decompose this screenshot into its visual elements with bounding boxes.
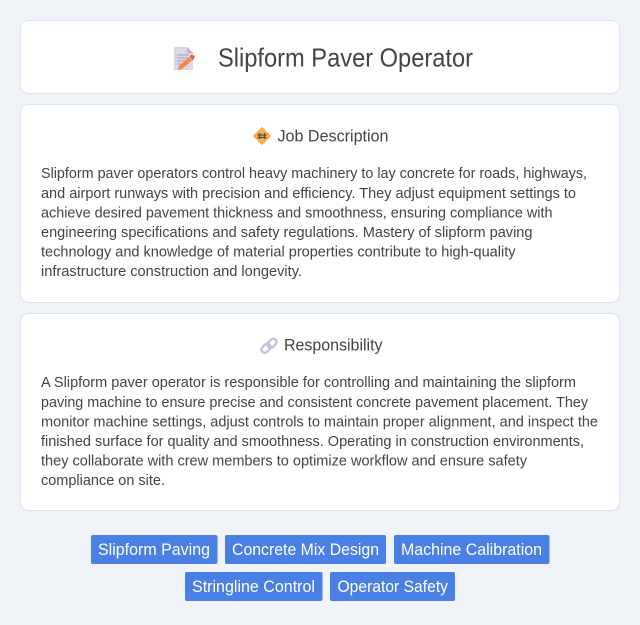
text block: job description: engineering specifications and safety regulations. Mastery of slipform paving bbox=[41, 225, 532, 241]
tag: Slipform Paving: Slipform Paving bbox=[98, 541, 210, 559]
tag: Machine Calibration bbox=[394, 535, 550, 564]
tag: Concrete Mix Design: Concrete Mix Design bbox=[232, 541, 379, 559]
tag: Stringline Control: Stringline Control bbox=[192, 578, 315, 596]
tag: Operator Safety bbox=[330, 572, 455, 601]
text block: job description: achieve desired pavement thickness and smoothness, ensuring compliance with bbox=[41, 205, 552, 221]
text block: responsibility: compliance on site. bbox=[41, 473, 165, 489]
panel: header bbox=[20, 20, 620, 94]
tag: Machine Calibration: Machine Calibration bbox=[401, 541, 542, 559]
text block: job description: and airport runways with precision and efficiency. They adjust equipment settings to bbox=[41, 186, 576, 202]
text block: job description: infrastructure construction and longevity. bbox=[41, 264, 302, 280]
panel: responsibility bbox=[20, 314, 620, 510]
text block: responsibility: monitor machine settings, adjust controls to maintain proper alignment, and inspect the bbox=[41, 414, 598, 430]
tag: Slipform Paving bbox=[91, 535, 218, 564]
text block: job description bbox=[41, 166, 587, 280]
title: Slipform Paver Operator bbox=[218, 42, 473, 72]
text block: responsibility: paving machine to ensure precise and consistent concrete pavement placement. They bbox=[41, 395, 589, 411]
heading: job description: Job Description bbox=[278, 127, 388, 145]
text block: responsibility: A Slipform paver operator is responsible for controlling and maintaining the slipform bbox=[41, 375, 576, 391]
tags bbox=[91, 535, 550, 601]
text block: responsibility bbox=[41, 375, 598, 489]
icon: chain link bbox=[260, 337, 278, 354]
text block: responsibility: they collaborate with crew members to optimize workflow and ensure safety bbox=[41, 454, 528, 470]
tag: Concrete Mix Design bbox=[225, 535, 386, 564]
panel: job description bbox=[20, 104, 620, 302]
tag: Operator Safety: Operator Safety bbox=[338, 578, 449, 596]
heading: responsibility: Responsibility bbox=[284, 336, 383, 354]
text block: job description: Slipform paver operators control heavy machinery to lay concrete for roads, highways, bbox=[41, 166, 587, 182]
icon: road sign diamond bbox=[254, 128, 270, 144]
text block: job description: technology and knowledge of material properties contribute to high-quality bbox=[41, 245, 516, 261]
tag: Stringline Control bbox=[185, 572, 322, 601]
icon: document with pencil bbox=[174, 47, 195, 70]
text block: responsibility: finished surface for quality and smoothness. Operating in construction environments, bbox=[41, 434, 584, 450]
